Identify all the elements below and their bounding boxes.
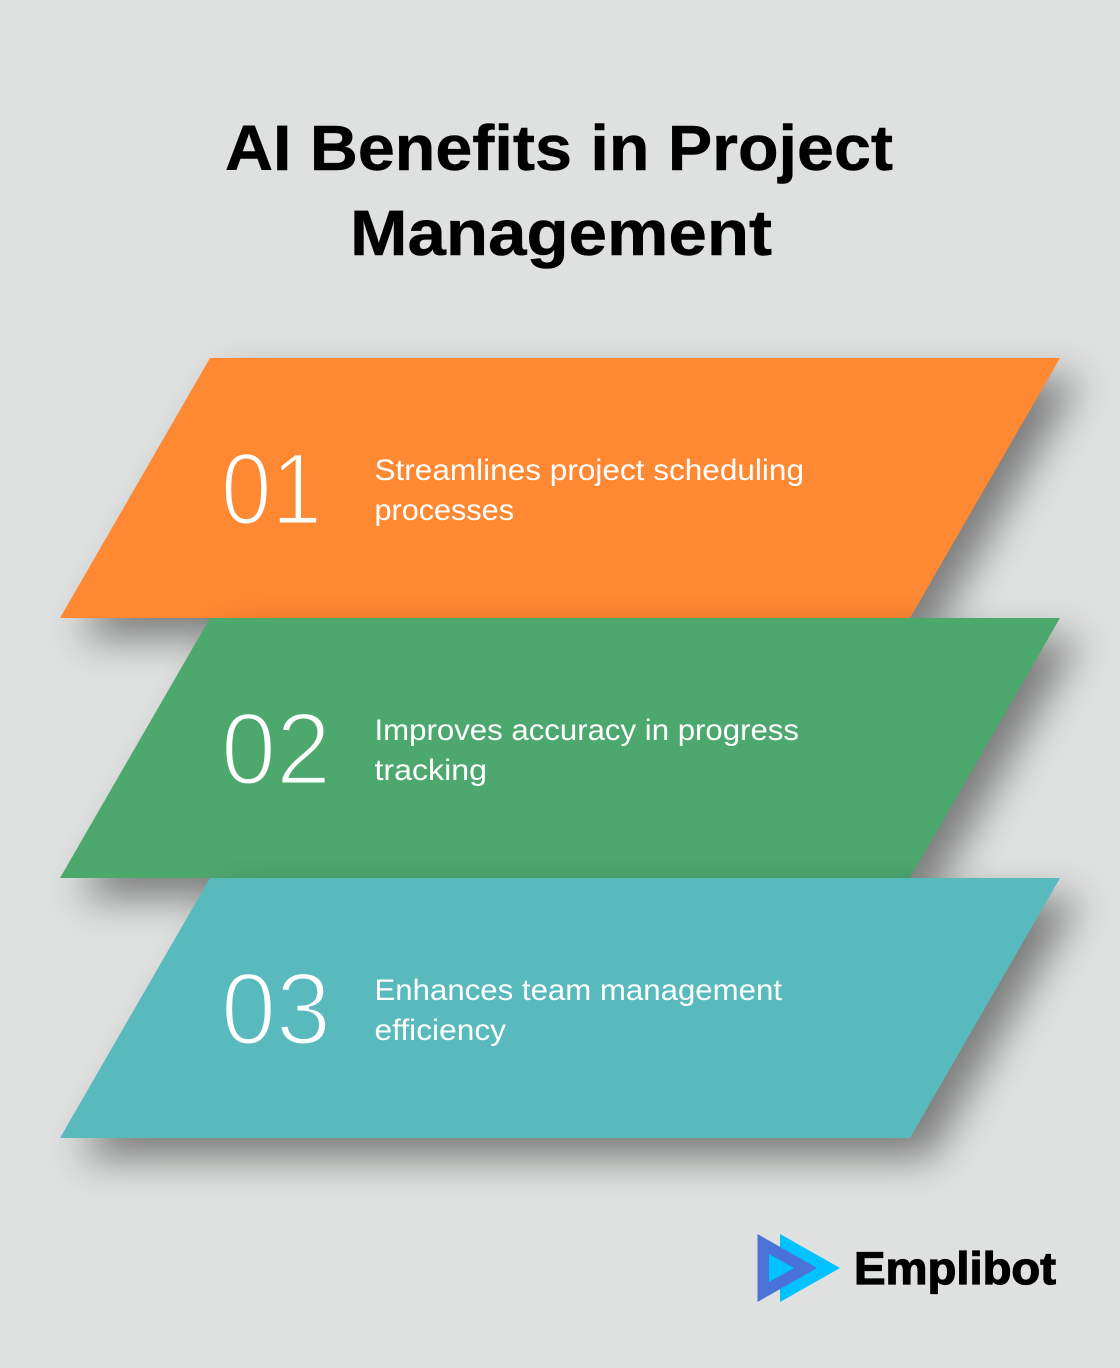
text: step 01 description [374, 454, 804, 527]
icon: play triangles [758, 1234, 840, 1302]
text: step 01 description: processes [374, 494, 514, 527]
text: step 03 description: efficiency [374, 1014, 506, 1047]
text: step 02 description: Improves accuracy in progress [374, 714, 799, 747]
logo: Emplibot [758, 1234, 1056, 1302]
title: AI Benefits in Project [225, 112, 893, 184]
text: step 02 description [374, 714, 799, 787]
panel: step 02 [60, 618, 1060, 878]
title: Management [350, 197, 772, 269]
panel: step 01 [60, 358, 1060, 618]
title [225, 112, 893, 269]
number 01: 01 [221, 432, 322, 546]
panel: step 03 [60, 878, 1060, 1138]
number 03: 03 [221, 952, 331, 1066]
wordmark: Emplibot [854, 1243, 1056, 1294]
number 02: 02 [221, 692, 331, 806]
text: step 01 description: Streamlines project scheduling [374, 454, 804, 487]
text: step 03 description [374, 974, 783, 1047]
text: step 02 description: tracking [374, 754, 487, 787]
text: step 03 description: Enhances team management [374, 974, 783, 1007]
